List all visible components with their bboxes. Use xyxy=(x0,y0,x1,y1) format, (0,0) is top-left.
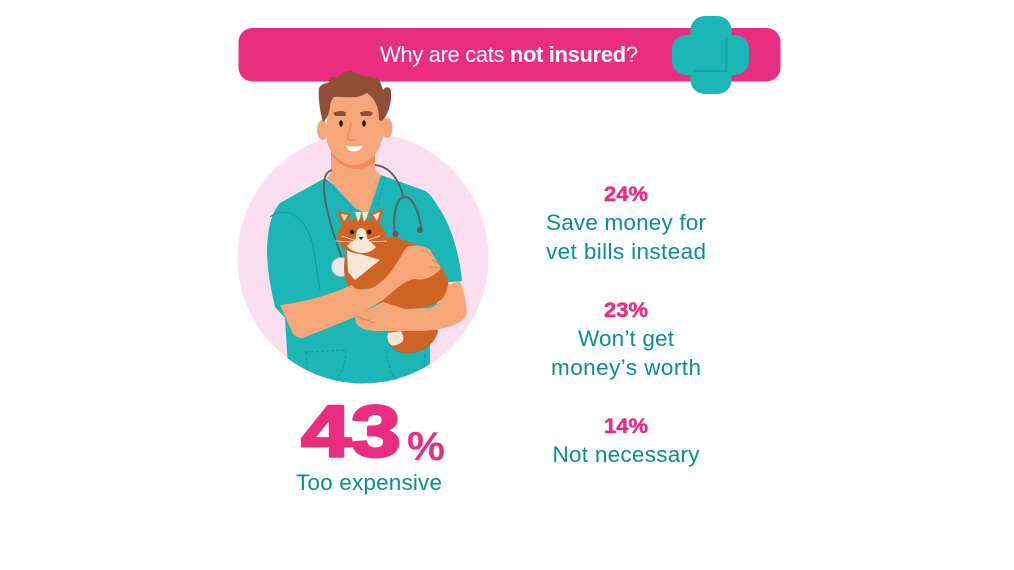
vet hair xyxy=(319,71,391,122)
scrubs seams and pockets xyxy=(270,178,425,380)
background circle xyxy=(238,132,488,384)
vet eyes xyxy=(339,120,343,127)
cat eyes xyxy=(350,230,354,234)
neck shadow xyxy=(331,148,375,169)
cat bib xyxy=(347,250,380,280)
stat: 14%: 14% xyxy=(604,415,648,438)
cat tail xyxy=(388,329,438,353)
stat: 23%: money’s worth xyxy=(551,355,701,380)
cat inner ears xyxy=(341,212,380,221)
cat nose xyxy=(358,237,364,240)
cat tail tip xyxy=(387,331,403,346)
stethoscope chest piece xyxy=(332,258,350,276)
vet face xyxy=(327,90,385,165)
cat back body xyxy=(360,236,448,309)
stat: 14% xyxy=(552,415,700,467)
vet smile xyxy=(346,146,363,152)
stethoscope xyxy=(324,165,421,258)
hand finger lines xyxy=(356,251,441,323)
number 43: 43 xyxy=(301,392,401,472)
stat: 24% xyxy=(546,183,706,264)
stat: 23%: 23% xyxy=(604,299,648,322)
banner title: Why are cats not insured? xyxy=(380,42,638,67)
cat front body xyxy=(344,236,408,291)
stat: 24%: vet bills instead xyxy=(546,239,706,264)
vet upper arm and hand xyxy=(280,246,441,338)
vet eyebrows xyxy=(333,111,373,116)
stat: 24%: Save money for xyxy=(546,210,706,235)
percent sign: % xyxy=(407,423,445,469)
cat head stripes xyxy=(355,212,368,222)
cat face patch xyxy=(347,228,376,253)
label: Too expensive xyxy=(296,470,442,495)
icon: medical cross xyxy=(672,16,749,94)
vet neck xyxy=(327,145,381,214)
stat: 24%: 24% xyxy=(604,183,648,206)
vet ears xyxy=(317,120,328,140)
stat: 43% too expensive xyxy=(296,392,445,495)
cat head xyxy=(338,218,386,254)
stat: 14%: Not necessary xyxy=(552,442,700,467)
vet lower arm xyxy=(355,281,467,331)
illustration: vet holding cat xyxy=(267,71,467,400)
cat ears xyxy=(337,209,384,228)
stat: 23% xyxy=(551,299,701,380)
vet scrubs xyxy=(267,175,462,400)
cat whiskers xyxy=(335,236,387,242)
stethoscope tips xyxy=(392,231,398,237)
vet nose xyxy=(348,122,355,140)
stat: 23%: Won’t get xyxy=(578,326,675,351)
title banner xyxy=(238,28,780,82)
